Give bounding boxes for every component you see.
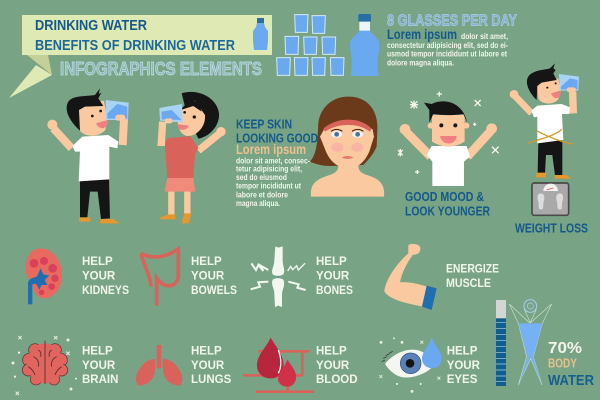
label: help your brain (82, 345, 118, 386)
label: energize muscle (446, 264, 499, 290)
label: help your bowels: HELP (191, 256, 222, 268)
subtitle: INFOGRAPHICS ELEMENTS (60, 59, 262, 79)
text block: 8 glasses per day: dolore magna aliqua. (387, 58, 454, 68)
icon: bones (251, 246, 306, 307)
caption: good mood (405, 190, 490, 218)
icon: brain (12, 336, 182, 395)
man drinking with tape measure (510, 63, 579, 179)
label: help your bones: YOUR (316, 271, 350, 283)
stat: 70% body water: BODY (548, 357, 578, 371)
label: help your brain: BRAIN (82, 374, 118, 386)
label: help your bones: BONES (316, 285, 353, 297)
label: help your lungs (191, 345, 232, 386)
label: help your lungs: LUNGS (191, 374, 232, 386)
text block: 8 glasses per day: Lorem ipsum (387, 26, 457, 42)
icon: bowels (141, 249, 178, 306)
label: help your eyes: HELP (447, 345, 478, 357)
icon: lungs (136, 345, 182, 386)
label: help your brain: HELP (82, 345, 113, 357)
chart: body water gauge and figure (496, 300, 552, 386)
label: help your bowels (191, 256, 237, 297)
text block: keep skin looking good: KEEP SKIN (236, 116, 292, 132)
icon: flexed arm (384, 244, 437, 310)
label: help your blood: BLOOD (316, 374, 358, 386)
happy man with sparkles (398, 63, 579, 215)
label: help your bowels: YOUR (191, 271, 225, 283)
icon: eye with tear drop (379, 337, 442, 392)
text block: 8 glasses per day: usmod tempor incididunt ut labore et (387, 50, 507, 58)
label: help your bones (316, 256, 353, 297)
text block: 8 glasses per day: consectetur adipisicing elit, sed do ei- (387, 41, 508, 50)
text block: keep skin looking good: dolor sit amet, consec- (236, 156, 310, 165)
stat: 70% body water: WATER (548, 372, 594, 389)
text block: keep skin looking good: labore et dolore (236, 190, 288, 199)
label: help your blood: YOUR (316, 360, 350, 372)
icon: bathroom scale (532, 183, 569, 215)
label: help your bones: HELP (316, 256, 347, 268)
caption: good mood: LOOK YOUNGER (405, 204, 490, 218)
label: energize muscle: ENERGIZE (446, 264, 499, 276)
caption: weight loss: WEIGHT LOSS (515, 221, 588, 235)
text block: 8 glasses per day: dolor sit amet, (461, 32, 508, 41)
woman drinking water (159, 92, 226, 223)
text block: keep skin looking good: tetur adipisicing elit, (236, 165, 302, 174)
label: energize muscle: MUSCLE (446, 278, 491, 290)
text block: keep skin looking good: tempor incididunt ut (236, 182, 301, 191)
icon: kidney (26, 248, 178, 306)
label: help your kidneys: KIDNEYS (82, 285, 129, 297)
text block: 8 glasses per day (387, 12, 517, 68)
title banner: DRINKING WATER (35, 18, 147, 34)
caption: good mood: GOOD MOOD & (405, 190, 484, 204)
stat: 70% body water: 70% (548, 340, 582, 357)
label: help your kidneys: YOUR (82, 271, 116, 283)
icon: blood drops (243, 338, 314, 392)
label: help your eyes: YOUR (447, 360, 481, 372)
title banner: BENEFITS OF DRINKING WATER (35, 38, 235, 54)
text block: 8 glasses per day: 8 GLASSES PER DAY (387, 12, 517, 30)
woman's face portrait (310, 97, 384, 197)
icon: stacked glasses and bottle (277, 14, 379, 76)
text block: keep skin looking good: Lorem ipsum (236, 141, 306, 157)
man drinking water (47, 88, 226, 223)
text block: keep skin looking good: LOOKING GOOD (236, 130, 318, 145)
label: help your eyes: EYES (447, 374, 478, 386)
label: help your blood (316, 345, 358, 386)
label: help your kidneys: HELP (82, 256, 113, 268)
label: help your brain: YOUR (82, 360, 116, 372)
title banner (9, 15, 272, 98)
text block: keep skin looking good: sed do eiusmod (236, 173, 287, 182)
label: help your eyes (447, 345, 481, 386)
label: help your lungs: YOUR (191, 360, 225, 372)
label: help your lungs: HELP (191, 345, 222, 357)
label: help your kidneys (82, 256, 129, 297)
text block: keep skin looking good: magna aliqua. (236, 199, 280, 208)
label: help your blood: HELP (316, 345, 347, 357)
stat: 70% body water (548, 340, 594, 389)
label: help your bowels: BOWELS (191, 285, 237, 297)
text block: keep skin looking good (236, 116, 318, 208)
